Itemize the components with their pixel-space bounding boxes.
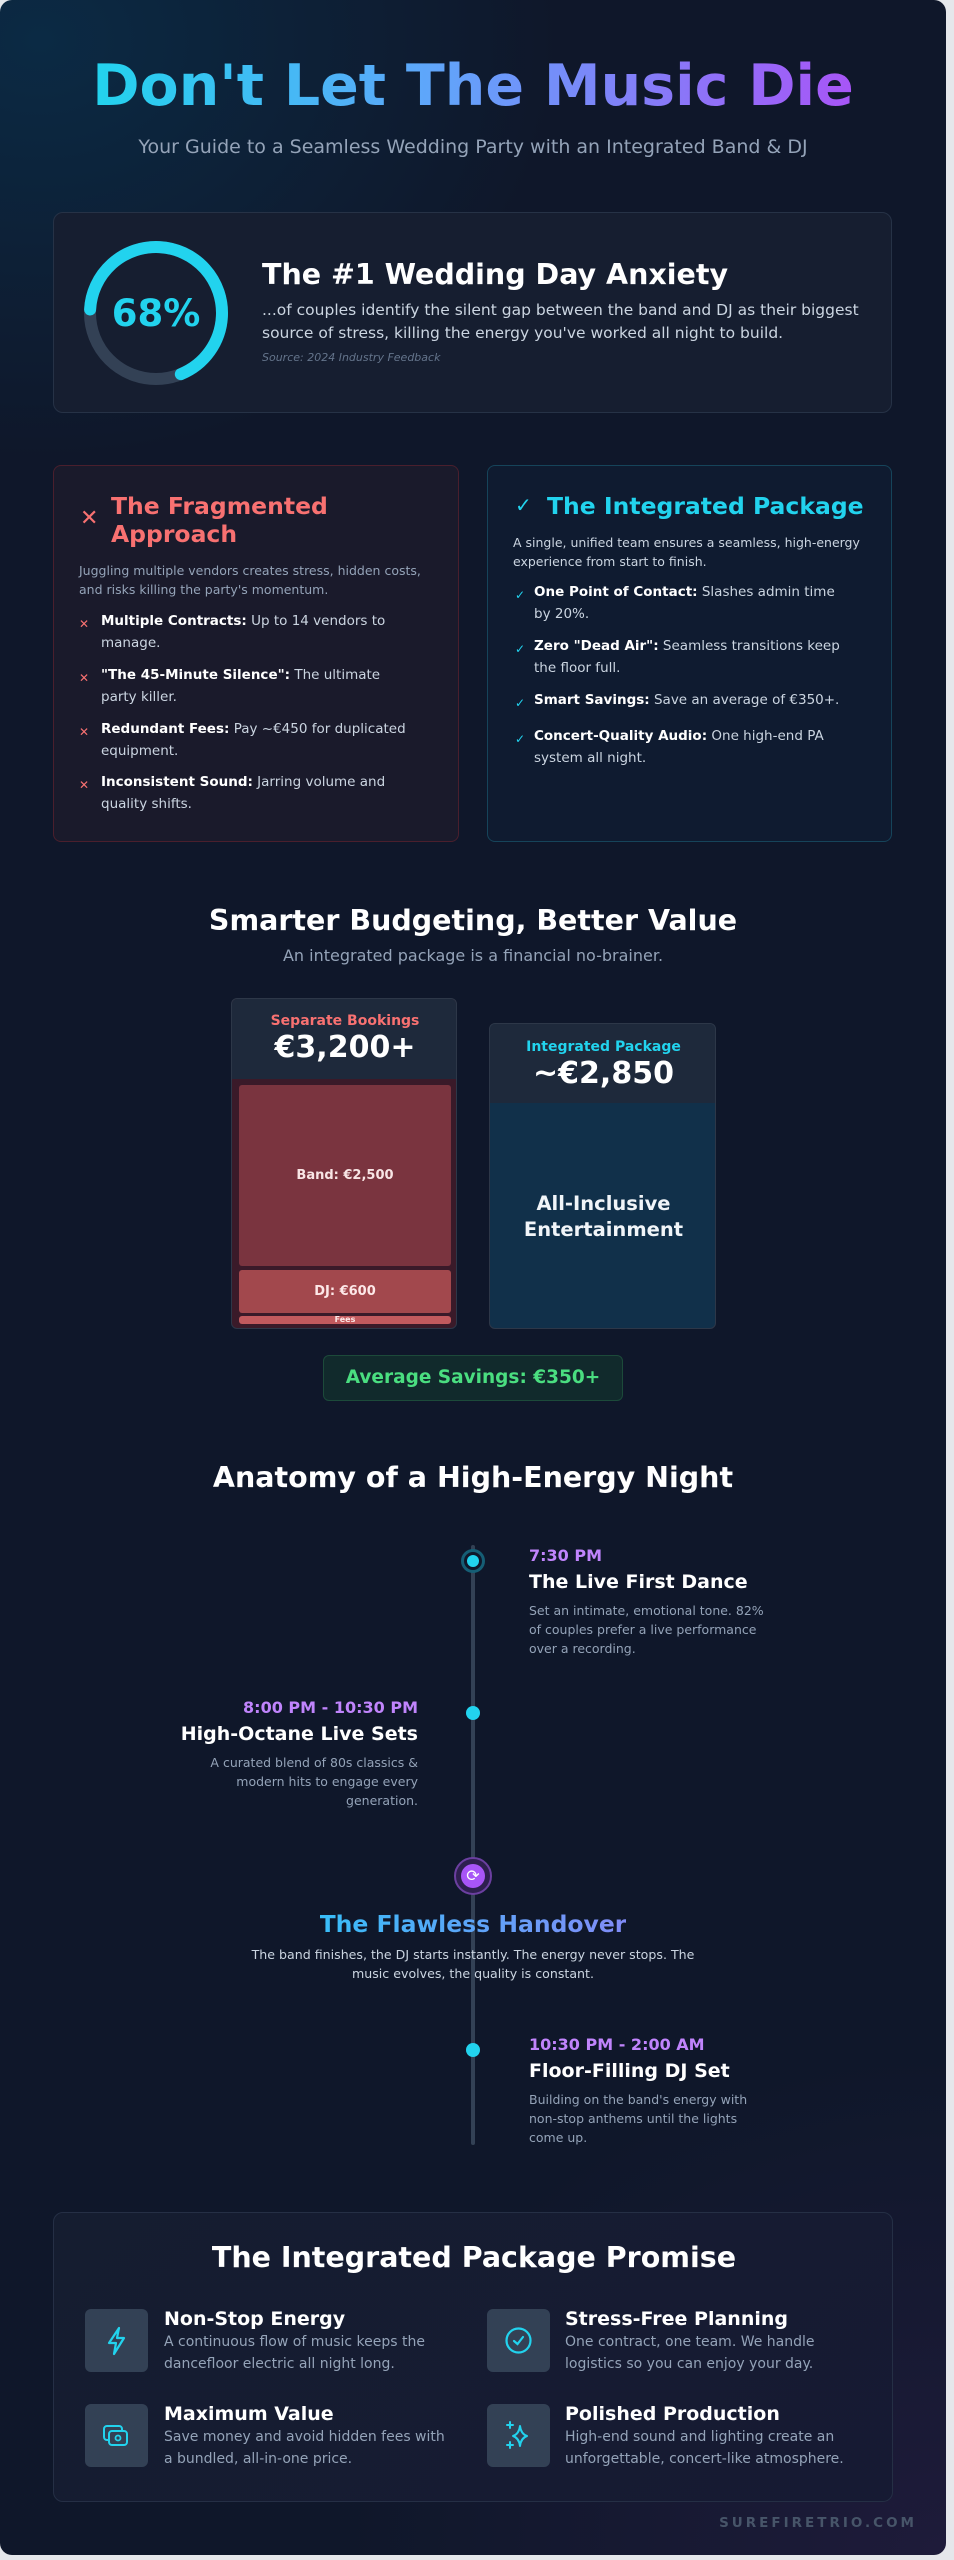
panel description [513, 535, 860, 569]
event 2: modern hits to engage every [236, 1774, 418, 1789]
list: ✓ [515, 588, 525, 602]
item: polished production: unforgettable, concert-like atmosphere. [565, 2451, 844, 2467]
savings badge: Average Savings: €350+ [346, 1367, 600, 1388]
list: Redundant Fees: Pay ~€450 for duplicated [101, 721, 406, 737]
item: polished production [487, 2403, 844, 2467]
event 2: 8:00 PM - 10:30 PM [243, 1698, 418, 1717]
event 3: Floor-Filling DJ Set [529, 2060, 730, 2082]
icon: sparkles [487, 2404, 550, 2467]
panel description: Juggling multiple vendors creates stress, hidden costs, [79, 563, 421, 578]
body label [524, 1192, 683, 1241]
event 2: A curated blend of 80s classics & [210, 1755, 418, 1770]
title: Don't Let The Music Die [92, 53, 854, 119]
subtitle: Your Guide to a Seamless Wedding Party with an Integrated Band & DJ [138, 136, 808, 158]
panel: promise [53, 2212, 893, 2502]
header [490, 1024, 717, 1103]
timeline line [471, 1545, 475, 2145]
panel description [78, 563, 421, 597]
icon: check: ✓ [515, 493, 532, 517]
card heading: The #1 Wedding Day Anxiety [262, 258, 728, 291]
item: maximum value [85, 2403, 445, 2467]
budgeting subtitle: An integrated package is a financial no-brainer. [283, 946, 663, 965]
panel description: A single, unified team ensures a seamless, high-energy [513, 535, 860, 550]
event 3: come up. [529, 2130, 587, 2145]
item: non-stop energy: dancefloor electric all night long. [164, 2356, 395, 2372]
footer brand: SUREFIRETRIO.COM [719, 2515, 917, 2531]
event 2: generation. [346, 1793, 418, 1808]
ring chart 68% [84, 241, 228, 385]
list: ✕ [79, 671, 89, 685]
bar: separate bookings [231, 998, 457, 1329]
timeline heading: Anatomy of a High-Energy Night [213, 1461, 733, 1494]
list: Multiple Contracts: Up to 14 vendors to [101, 613, 385, 629]
list: system all night. [534, 750, 646, 766]
item: non-stop energy: Non-Stop Energy [164, 2308, 345, 2330]
panel: fragmented approach [53, 465, 459, 842]
list: ✕ [79, 617, 89, 631]
list: "The 45-Minute Silence": The ultimate [101, 667, 380, 683]
icon: check circle [487, 2309, 550, 2372]
icon: handover: ⟳ [466, 1866, 480, 1885]
marker 1 [461, 1549, 485, 1573]
list: the floor full. [534, 660, 620, 676]
segment: dj: DJ: €600 [314, 1284, 376, 1299]
icon: cash [85, 2404, 148, 2467]
list [79, 613, 406, 812]
header: Integrated Package [526, 1039, 681, 1055]
event 3 [529, 2035, 747, 2145]
event 1: over a recording. [529, 1641, 636, 1656]
list: ✓ [515, 732, 525, 746]
segment: fees: Fees [335, 1315, 355, 1324]
handover text: music evolves, the quality is constant. [352, 1966, 594, 1981]
list: quality shifts. [101, 796, 192, 812]
event 3: 10:30 PM - 2:00 AM [529, 2035, 705, 2054]
item: stress-free planning: Stress-Free Planning [565, 2308, 788, 2330]
panel heading [111, 492, 328, 548]
list: ✕ [79, 778, 89, 792]
panel: integrated package [487, 465, 892, 842]
event 2 [181, 1698, 418, 1808]
panel heading: The Fragmented [111, 492, 328, 520]
item: non-stop energy: A continuous flow of music keeps the [164, 2334, 425, 2350]
header [232, 999, 458, 1079]
panel description: experience from start to finish. [513, 554, 707, 569]
segment: band [239, 1085, 451, 1266]
header: ~€2,850 [533, 1056, 674, 1091]
item: maximum value: Maximum Value [164, 2403, 334, 2425]
event 1: Set an intimate, emotional tone. 82% [529, 1603, 764, 1618]
stat card [53, 212, 892, 413]
body label: Entertainment [524, 1218, 683, 1241]
event 1: The Live First Dance [529, 1571, 748, 1593]
header: Separate Bookings [271, 1013, 419, 1029]
event 2: High-Octane Live Sets [181, 1723, 418, 1745]
panel description: and risks killing the party's momentum. [79, 582, 328, 597]
handover text [252, 1947, 694, 1981]
event 3: non-stop anthems until the lights [529, 2111, 737, 2126]
header: €3,200+ [275, 1030, 415, 1065]
list: ✓ [515, 642, 525, 656]
list: by 20%. [534, 606, 589, 622]
list: ✕ [79, 725, 89, 739]
marker 2 [466, 1706, 480, 1720]
list: Zero "Dead Air": Seamless transitions keep [534, 638, 840, 654]
icon: x: ✕ [80, 506, 98, 531]
card body: source of stress, killing the energy you've worked all night to build. [262, 324, 783, 342]
budgeting heading: Smarter Budgeting, Better Value [209, 904, 737, 937]
item: non-stop energy [85, 2308, 425, 2372]
event 3: Building on the band's energy with [529, 2092, 747, 2107]
list: One Point of Contact: Slashes admin time [534, 584, 835, 600]
list [515, 584, 840, 766]
panel heading: Approach [111, 520, 237, 548]
timeline [181, 1545, 764, 2145]
bar: integrated package [489, 1023, 716, 1329]
item: polished production: Polished Production [565, 2403, 780, 2425]
body label: All-Inclusive [536, 1192, 671, 1215]
icon: handover [454, 1857, 492, 1895]
list: Concert-Quality Audio: One high-end PA [534, 728, 824, 744]
handover heading: The Flawless Handover [320, 1910, 626, 1938]
list: party killer. [101, 688, 177, 704]
list: equipment. [101, 742, 178, 758]
icon: bolt [85, 2309, 148, 2372]
segment: band: Band: €2,500 [296, 1168, 394, 1183]
marker 3 [466, 2043, 480, 2057]
item: stress-free planning: logistics so you can enjoy your day. [565, 2356, 813, 2372]
list: Smart Savings: Save an average of €350+. [534, 692, 839, 708]
event 1: of couples prefer a live performance [529, 1622, 756, 1637]
list: Inconsistent Sound: Jarring volume and [101, 774, 385, 790]
list: ✓ [515, 696, 525, 710]
handover text: The band finishes, the DJ starts instantly. The energy never stops. The [252, 1947, 694, 1962]
item: stress-free planning: One contract, one team. We handle [565, 2334, 815, 2350]
item: maximum value: Save money and avoid hidden fees with [164, 2429, 445, 2445]
item: stress-free planning [487, 2308, 815, 2372]
savings badge [323, 1355, 623, 1401]
event 1 [529, 1546, 764, 1656]
event 1: 7:30 PM [529, 1546, 602, 1565]
panel heading: The Integrated Package [547, 492, 864, 520]
item: maximum value: a bundled, all-in-one price. [164, 2451, 352, 2467]
list: manage. [101, 634, 160, 650]
item: polished production: High-end sound and lighting create an [565, 2429, 834, 2445]
segment: dj [239, 1270, 451, 1313]
card body: ...of couples identify the silent gap between the band and DJ as their biggest [262, 301, 859, 319]
segment: fees [239, 1316, 451, 1324]
card body [262, 301, 859, 342]
promise heading: The Integrated Package Promise [212, 2241, 736, 2274]
source: Source: 2024 Industry Feedback [262, 351, 440, 364]
ring chart 68%: 68% [112, 292, 200, 335]
